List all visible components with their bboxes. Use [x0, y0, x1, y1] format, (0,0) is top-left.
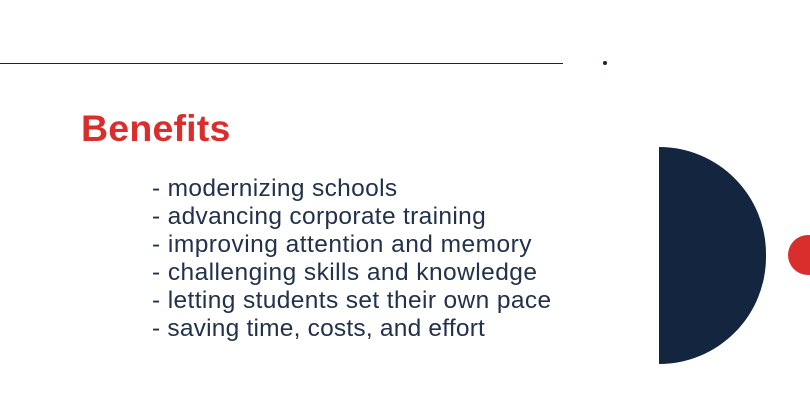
benefits list: - modernizing schools — [152, 175, 397, 202]
benefits list — [152, 175, 551, 342]
top rule line — [0, 63, 563, 64]
benefits list: - improving attention and memory — [152, 231, 532, 258]
benefits list: - letting students set their own pace — [152, 287, 551, 314]
benefits list: - advancing corporate training — [152, 203, 486, 230]
benefits list: - challenging skills and knowledge — [152, 259, 537, 286]
title: Benefits — [81, 107, 231, 149]
small dot — [603, 61, 607, 65]
navy half circle — [659, 147, 766, 364]
red circle — [788, 235, 810, 275]
benefits list: - saving time, costs, and effort — [152, 315, 485, 342]
